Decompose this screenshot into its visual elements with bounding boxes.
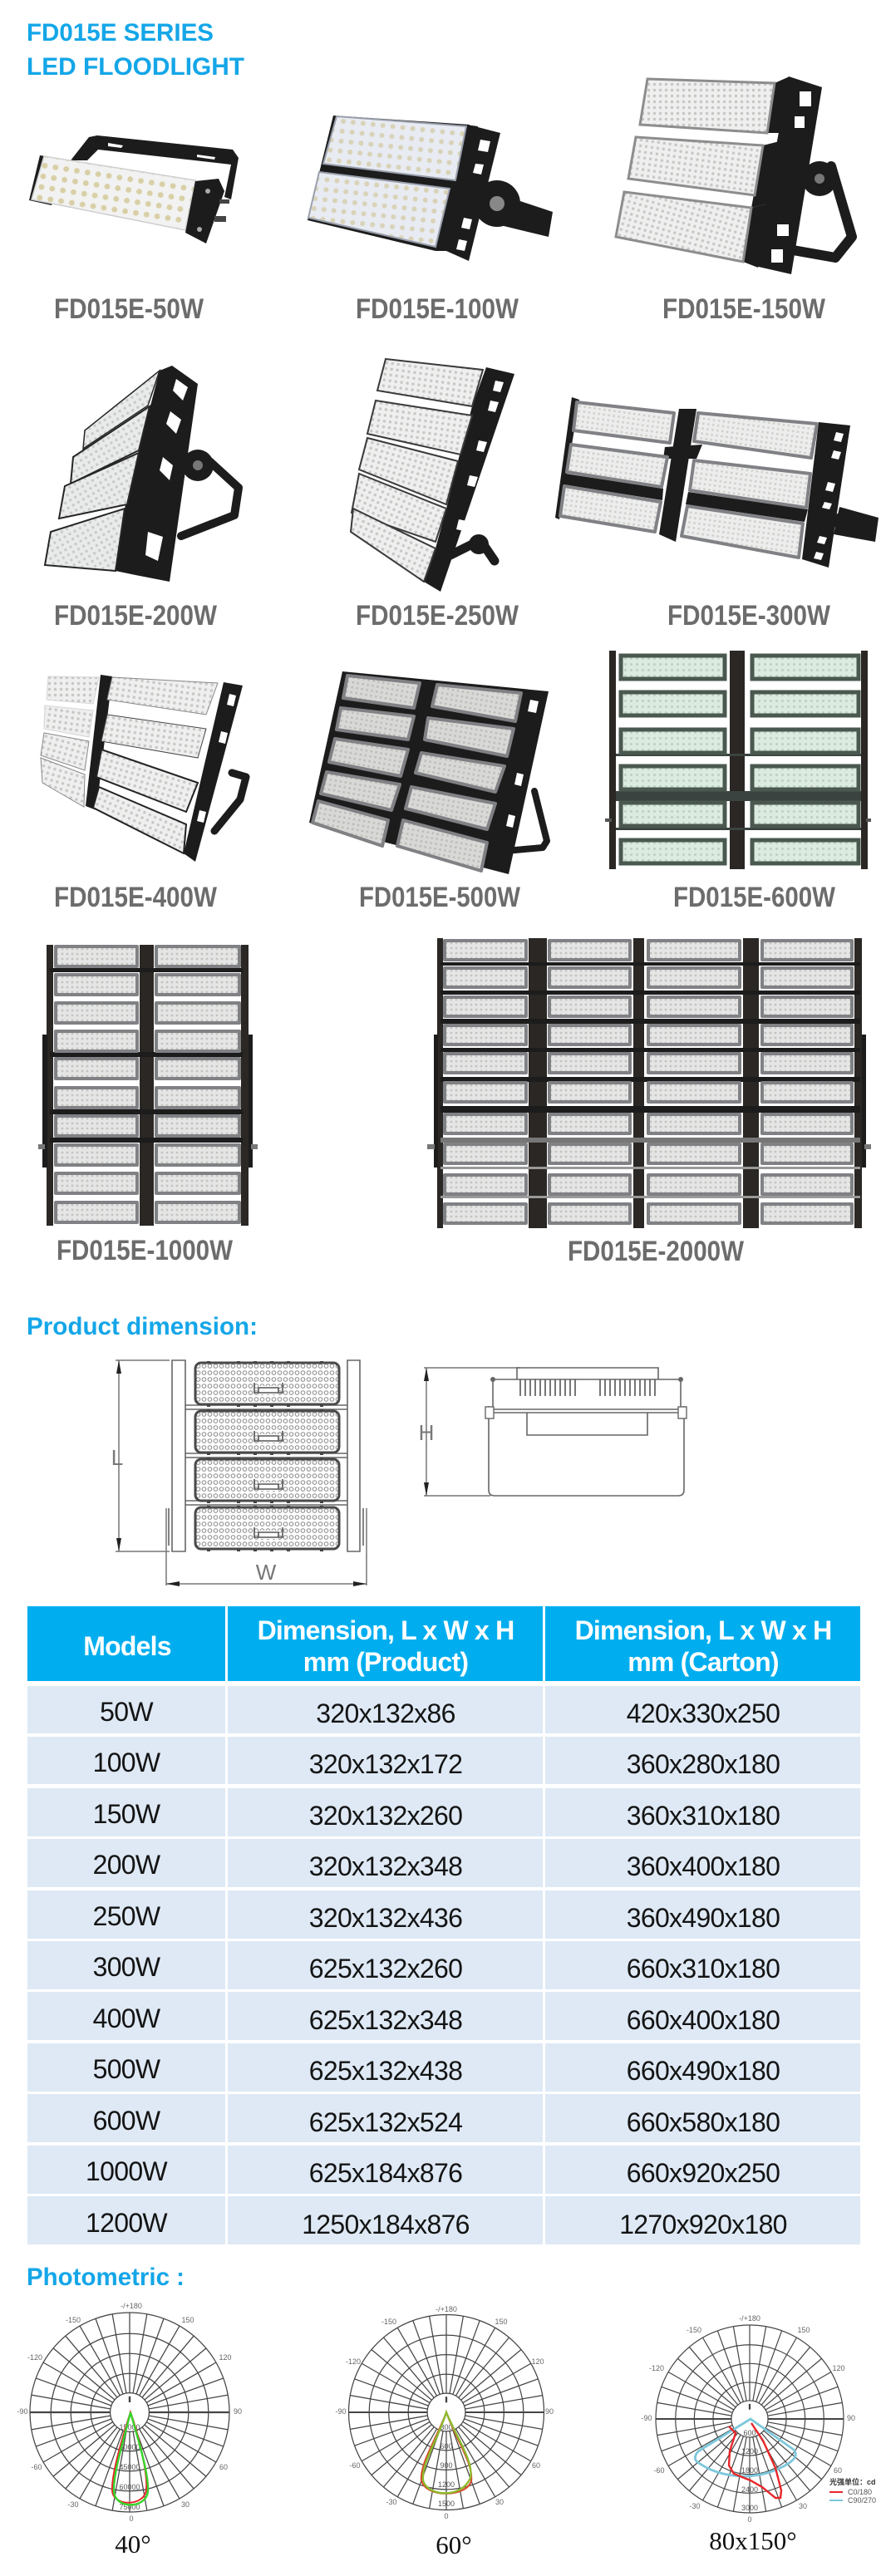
- polar chart: 60 degree beam: 30: [495, 2498, 504, 2506]
- row 200W: [27, 1839, 860, 1887]
- row 150W: 320x132x260: [309, 1801, 462, 1831]
- row 400W: 625x132x348: [309, 2005, 462, 2035]
- label: FD015E-250W: FD015E-250W: [356, 600, 519, 632]
- polar chart: 60 degree beam: -60: [349, 2461, 361, 2470]
- polar chart: 60 degree beam: 0: [444, 2512, 449, 2520]
- caption: 40°: 40°: [115, 2529, 151, 2559]
- row 500W: 500W: [93, 2054, 161, 2084]
- product: FD015E-600W floodlight: [605, 651, 871, 869]
- row 150W: [27, 1788, 860, 1836]
- polar chart: 60 degree beam: 150: [495, 2318, 508, 2326]
- dimension drawing: front view: [111, 1360, 367, 1586]
- row 600W: 660x580x180: [627, 2107, 780, 2137]
- polar chart: 40 degree beam: [17, 2302, 242, 2523]
- row 500W: 625x132x438: [309, 2056, 462, 2086]
- row 50W: 50W: [100, 1697, 154, 1727]
- polar chart: 60 degree beam: 1200: [438, 2480, 455, 2489]
- row 250W: [27, 1890, 860, 1939]
- polar chart: 40 degree beam: 0: [129, 2515, 134, 2523]
- polar chart: 80x150 degree beam: [641, 2314, 876, 2524]
- polar chart: 60 degree beam: -90: [335, 2407, 347, 2416]
- polar chart: 40 degree beam: 75000: [119, 2503, 140, 2511]
- row 50W: 320x132x86: [316, 1698, 455, 1728]
- dimension drawing: front view: L: [111, 1445, 123, 1470]
- polar chart: 40 degree beam: 30000: [119, 2443, 140, 2451]
- label: FD015E-1000W: FD015E-1000W: [57, 1235, 234, 1266]
- polar chart: 80x150 degree beam: 120: [832, 2364, 845, 2372]
- row 500W: 660x490x180: [627, 2056, 780, 2086]
- polar chart: 40 degree beam: -150: [66, 2316, 81, 2324]
- polar chart: 60 degree beam: 600: [440, 2442, 453, 2451]
- polar chart: 40 degree beam: -120: [27, 2353, 42, 2362]
- polar chart: 80x150 degree beam: 0: [747, 2515, 752, 2524]
- label: FD015E-200W: FD015E-200W: [54, 600, 218, 632]
- row 400W: 660x400x180: [627, 2005, 780, 2035]
- row 100W: 100W: [93, 1748, 161, 1777]
- label: FD015E-300W: FD015E-300W: [667, 600, 831, 632]
- polar chart: 80x150 degree beam: 600: [743, 2429, 756, 2437]
- row 600W: 600W: [93, 2106, 161, 2136]
- polar chart: 60 degree beam: -/+180: [436, 2305, 457, 2313]
- label: FD015E-400W: FD015E-400W: [54, 882, 218, 913]
- label: FD015E-50W: FD015E-50W: [54, 293, 204, 325]
- polar chart: 80x150 degree beam: -30: [689, 2502, 701, 2510]
- row 1000W: 1000W: [86, 2156, 168, 2186]
- product: FD015E-300W floodlight: [555, 397, 879, 568]
- table: dimensions: [27, 1606, 860, 2244]
- row 1000W: [27, 2146, 860, 2194]
- dimension drawing: front view: W: [256, 1560, 277, 1585]
- polar chart: 40 degree beam: 15000: [119, 2423, 140, 2431]
- product: FD015E-250W floodlight: [351, 359, 514, 592]
- row 250W: 320x132x436: [309, 1903, 462, 1933]
- row 1200W: 1250x184x876: [302, 2210, 470, 2239]
- row 100W: [27, 1737, 860, 1784]
- polar chart: 80x150 degree beam: 2400: [741, 2485, 758, 2494]
- row 400W: 400W: [93, 2003, 161, 2033]
- row 300W: 660x310x180: [627, 1954, 780, 1984]
- row 50W: [27, 1686, 860, 1733]
- polar chart: 80x150 degree beam: 3000: [741, 2504, 758, 2512]
- polar chart: 80x150 degree beam: 60: [834, 2466, 842, 2475]
- polar chart: 60 degree beam: -30: [386, 2498, 397, 2506]
- row 300W: [27, 1941, 860, 1989]
- polar chart: 80x150 degree beam: 150: [797, 2326, 810, 2334]
- polar chart: 40 degree beam: -/+180: [121, 2302, 142, 2310]
- title: [27, 19, 244, 81]
- polar chart: 80x150 degree beam: -/+180: [739, 2314, 760, 2323]
- polar chart: 60 degree beam: -150: [381, 2318, 396, 2326]
- polar chart: 40 degree beam: -60: [31, 2463, 42, 2471]
- table header row: mm (Carton): [628, 1647, 779, 1677]
- polar chart: 40 degree beam: 60000: [119, 2483, 140, 2491]
- table header row: mm (Product): [303, 1647, 468, 1677]
- polar chart: 60 degree beam: -120: [346, 2357, 361, 2366]
- label: FD015E-500W: FD015E-500W: [359, 882, 521, 913]
- row 300W: 300W: [93, 1952, 161, 1982]
- polar chart: 80x150 degree beam: 30: [799, 2502, 807, 2510]
- row 150W: 360x310x180: [627, 1801, 780, 1831]
- polar chart: 60 degree beam: 120: [531, 2357, 544, 2366]
- polar chart: 60 degree beam: 900: [440, 2461, 453, 2470]
- polar chart: 40 degree beam: 45000: [119, 2463, 140, 2471]
- legend: C90/270: [848, 2496, 876, 2505]
- heading: product dimension: Product dimension:: [27, 1313, 258, 1340]
- polar chart: 80x150 degree beam: 90: [847, 2414, 855, 2422]
- row 400W: [27, 1992, 860, 2040]
- polar chart: 40 degree beam: 30: [181, 2500, 189, 2509]
- table header row: Dimension, L x W x H: [258, 1615, 514, 1645]
- label: FD015E-2000W: FD015E-2000W: [568, 1236, 745, 1267]
- row 100W: 320x132x172: [309, 1749, 462, 1779]
- legend: [829, 2477, 876, 2505]
- legend: C0/180: [848, 2488, 872, 2496]
- polar chart: 80x150 degree beam: -120: [649, 2364, 664, 2372]
- polar chart: 80x150 degree beam: -60: [653, 2466, 665, 2475]
- polar chart: 40 degree beam: 120: [219, 2353, 232, 2362]
- polar chart: 80x150 degree beam: 1800: [741, 2466, 758, 2475]
- row 1000W: 660x920x250: [627, 2158, 780, 2188]
- heading: photometric: Photometric :: [27, 2264, 185, 2291]
- legend: 光强单位：cd: [829, 2477, 876, 2486]
- row 1200W: [27, 2196, 860, 2244]
- row 250W: 250W: [93, 1901, 161, 1931]
- product: FD015E-400W floodlight: [41, 675, 246, 862]
- caption: 60°: 60°: [436, 2530, 472, 2559]
- label: FD015E-100W: FD015E-100W: [356, 293, 519, 325]
- polar chart: 80x150 degree beam: -90: [641, 2414, 652, 2422]
- table header row: Dimension, L x W x H: [575, 1615, 831, 1645]
- row 150W: 150W: [93, 1799, 161, 1829]
- row 250W: 360x490x180: [627, 1903, 780, 1933]
- caption: 80x150°: 80x150°: [709, 2526, 797, 2555]
- polar chart: 80x150 degree beam: -150: [687, 2326, 701, 2334]
- table header row: Models: [83, 1631, 171, 1661]
- product: FD015E-2000W floodlight: [427, 938, 871, 1228]
- title: LED FLOODLIGHT: [27, 53, 244, 81]
- polar chart: 80x150 degree beam: 1200: [741, 2447, 758, 2456]
- product: FD015E-500W floodlight: [309, 671, 549, 874]
- product: FD015E-200W floodlight: [45, 366, 239, 582]
- polar chart: 40 degree beam: 90: [234, 2407, 242, 2416]
- polar chart: 40 degree beam: 150: [181, 2316, 194, 2324]
- row 1200W: 1270x920x180: [619, 2210, 787, 2239]
- label: FD015E-150W: FD015E-150W: [662, 293, 826, 325]
- title: FD015E SERIES: [27, 19, 214, 47]
- row 500W: [27, 2043, 860, 2092]
- row 1200W: 1200W: [86, 2208, 168, 2238]
- polar chart: 60 degree beam: 60: [532, 2461, 540, 2470]
- polar chart: 60 degree beam: 90: [545, 2407, 554, 2416]
- row 50W: 420x330x250: [627, 1698, 780, 1728]
- product: FD015E-100W floodlight: [308, 116, 553, 261]
- row 600W: [27, 2094, 860, 2142]
- row 200W: 200W: [93, 1850, 161, 1880]
- row 100W: 360x280x180: [627, 1749, 780, 1779]
- label: FD015E-600W: FD015E-600W: [673, 882, 836, 913]
- product: FD015E-50W floodlight: [29, 135, 239, 243]
- product: FD015E-1000W floodlight: [38, 945, 258, 1226]
- row 1000W: 625x184x876: [309, 2158, 462, 2188]
- row 300W: 625x132x260: [309, 1954, 462, 1984]
- polar chart: 60 degree beam: [335, 2305, 554, 2520]
- polar chart: 40 degree beam: 60: [219, 2463, 228, 2471]
- dimension drawing: side view: H: [419, 1420, 434, 1445]
- polar chart: 60 degree beam: 1500: [438, 2500, 455, 2508]
- polar chart: 40 degree beam: -30: [67, 2500, 79, 2509]
- row 200W: 320x132x348: [309, 1851, 462, 1881]
- polar chart: 60 degree beam: 300: [440, 2423, 453, 2431]
- product: FD015E-150W floodlight: [616, 76, 852, 274]
- row 600W: 625x132x524: [309, 2107, 462, 2137]
- table header row: [27, 1606, 860, 1681]
- row 200W: 360x400x180: [627, 1851, 780, 1881]
- polar chart: 40 degree beam: -90: [17, 2407, 28, 2416]
- dimension drawing: side view: [419, 1368, 687, 1496]
